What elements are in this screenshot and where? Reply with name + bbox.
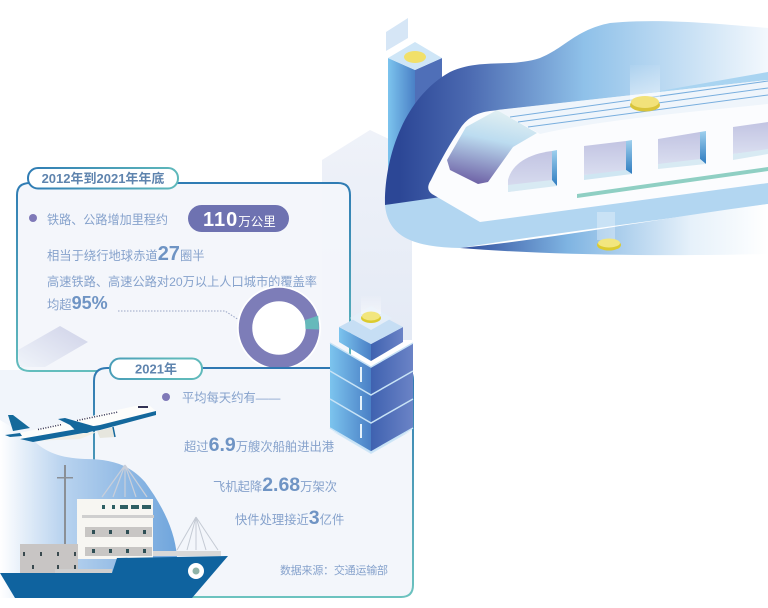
bullet: mileage [29,214,37,222]
background blob behind ship [0,420,177,598]
panel: 2021 [94,358,413,597]
fore crane [177,517,218,550]
heading pill: 2012年到2021年年底: 2012年到2021年年底 [42,171,164,186]
aft block [20,544,78,574]
bridge windows [102,505,151,509]
building stack with coin [330,296,413,454]
text: ships: 超过6.9万艘次船舶进出港 [184,434,335,456]
deck bands [85,527,152,537]
hull [0,556,228,598]
deck windows [92,530,146,553]
mast [64,465,66,547]
heading pill: 2021年: 2021年 [135,362,177,376]
cargo ship [0,465,228,598]
train illustration [385,21,768,255]
airplane [5,405,156,442]
text: source: 数据来源：交通运输部 [280,563,388,577]
background: pale isometric building [0,130,412,460]
text: 27 laps: 相当于绕行地球赤道27圈半 [47,243,205,265]
porthole [188,563,204,579]
panel: 2012 to 2021 [17,168,350,371]
leader line [118,311,239,320]
text: mileage: 铁路、公路增加里程约 [47,212,168,227]
heading pill: 2012年到2021年年底 [28,168,178,188]
text: flights: 飞机起降2.68万架次 [213,474,337,496]
text: 95%: 均超95% [47,293,108,313]
text: daily: 平均每天约有—— [182,390,281,405]
text: coverage: 高速铁路、高速公路对20万以上人口城市的覆盖率 [47,274,317,289]
decorative block [18,326,88,367]
pill: 110万公里 [188,205,289,232]
crane rigging rear [102,465,147,497]
coin on train [630,65,660,112]
tower with coin [386,18,442,170]
heading pill: 2021年 [110,358,202,379]
donut chart: 95% [237,286,321,370]
superstructure [77,499,153,559]
pill: 110万公里: 110万公里 [203,209,276,231]
bullet: daily [162,393,170,401]
deck rail [82,515,154,518]
coin below train [597,212,621,250]
text: parcels: 快件处理接近3亿件 [235,507,344,529]
